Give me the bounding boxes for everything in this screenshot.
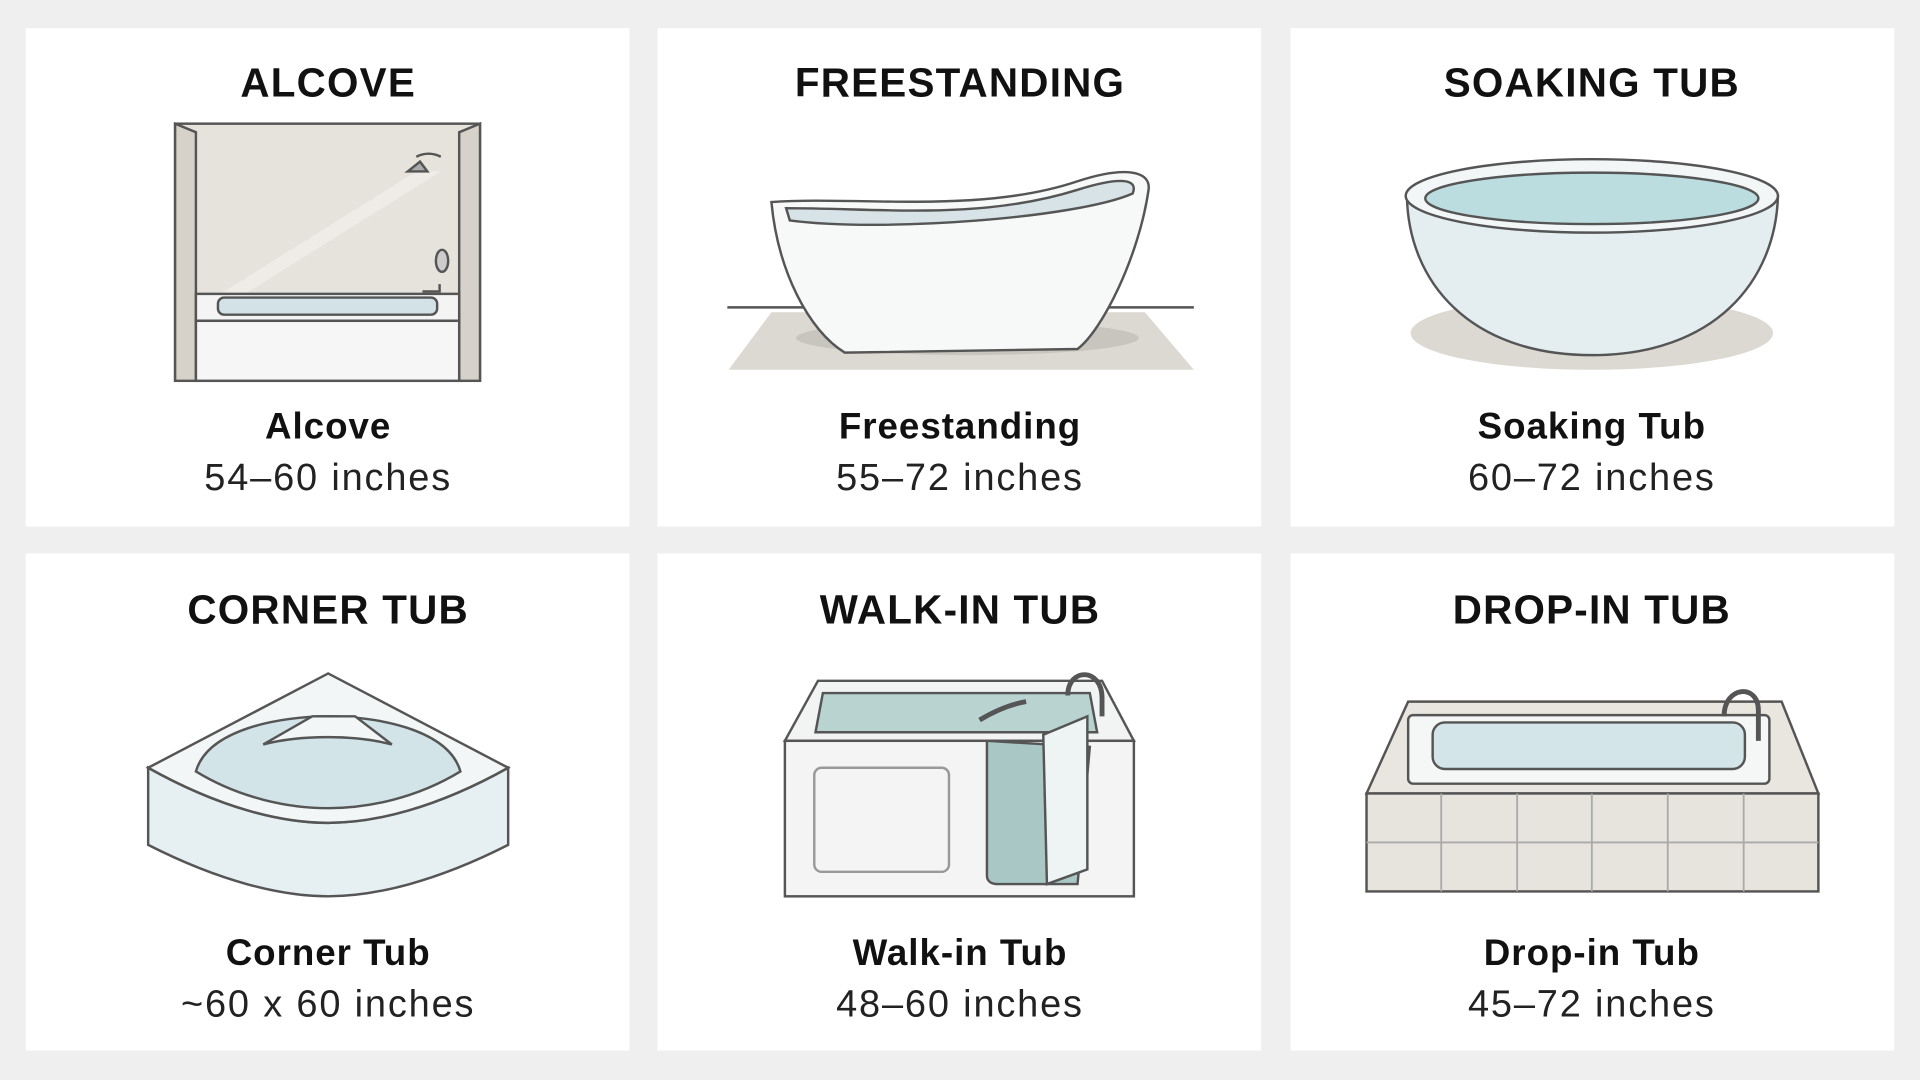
icon: drop-in tub (1367, 692, 1818, 891)
heading: freestanding: FREESTANDING (795, 60, 1125, 106)
size: corner tub: ~60 x 60 inches (181, 983, 475, 1025)
size: soaking tub: 60–72 inches (1468, 457, 1716, 499)
heading: soaking tub: SOAKING TUB (1444, 60, 1740, 106)
size: alcove: 54–60 inches (204, 457, 452, 499)
icon: freestanding tub (727, 172, 1194, 370)
panel: freestanding (658, 28, 1261, 527)
label: walk-in tub: Walk-in Tub (853, 932, 1067, 973)
panel: soaking tub (1291, 28, 1894, 527)
panel: alcove (26, 28, 629, 527)
label: alcove: Alcove (265, 405, 391, 446)
heading: drop-in tub: DROP-IN TUB (1453, 586, 1731, 632)
heading: walk-in tub: WALK-IN TUB (820, 586, 1100, 632)
label: soaking tub: Soaking Tub (1478, 405, 1706, 446)
panel: corner tub (26, 553, 629, 1051)
size: walk-in tub: 48–60 inches (836, 983, 1084, 1025)
icon: walk-in tub (785, 675, 1134, 896)
icon: soaking tub (1406, 159, 1778, 370)
heading: corner tub: CORNER TUB (187, 586, 469, 632)
label: freestanding: Freestanding (839, 405, 1081, 446)
heading: alcove: ALCOVE (240, 60, 416, 106)
size: drop-in tub: 45–72 inches (1468, 983, 1716, 1025)
icon: alcove tub (175, 124, 480, 381)
label: drop-in tub: Drop-in Tub (1484, 932, 1700, 973)
size: freestanding: 55–72 inches (836, 457, 1084, 499)
panel: walk-in tub (658, 553, 1261, 1051)
icon: corner tub (148, 673, 508, 896)
label: corner tub: Corner Tub (226, 932, 431, 973)
panel: drop-in tub (1291, 553, 1894, 1051)
